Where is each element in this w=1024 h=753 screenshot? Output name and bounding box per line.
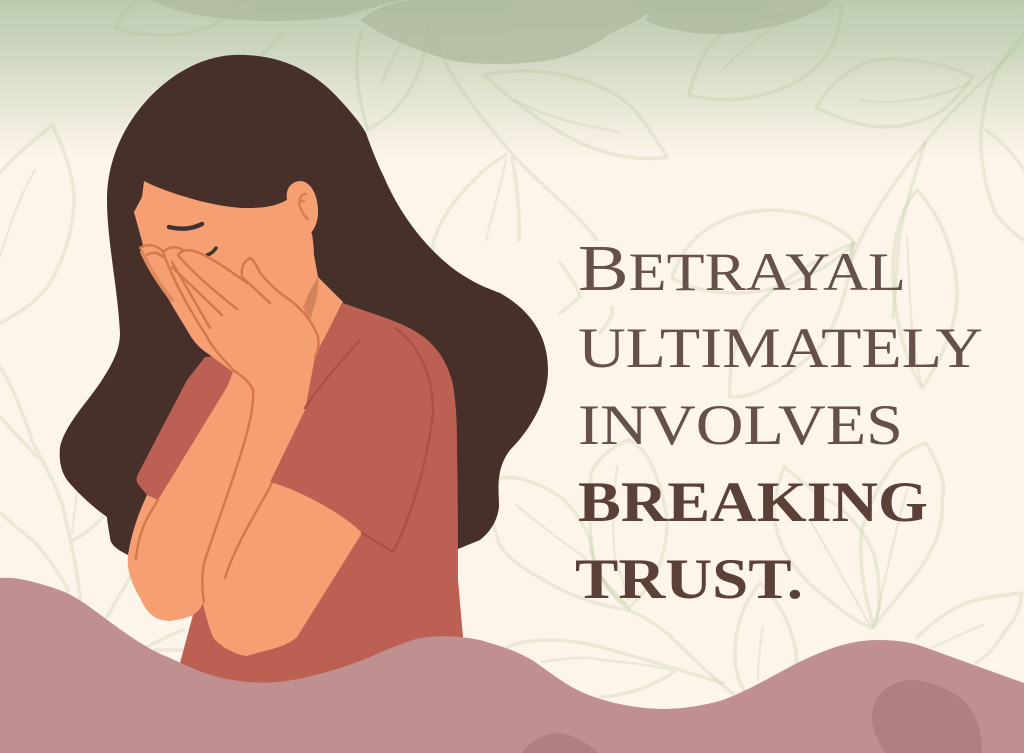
line: breaking: BREAKING bbox=[578, 471, 928, 534]
line: Betrayal: BETRAYAL bbox=[578, 232, 906, 305]
leaf outlines lower left bbox=[0, 367, 80, 600]
ear bbox=[287, 181, 318, 234]
stems bbox=[849, 40, 1024, 266]
leaf outlines lower right bbox=[492, 477, 629, 610]
top foliage bbox=[150, 0, 833, 64]
shirt bbox=[136, 303, 470, 690]
woman illustration bbox=[60, 55, 548, 690]
face bbox=[134, 181, 314, 320]
hair bbox=[60, 55, 548, 620]
leaf outlines top bbox=[484, 71, 667, 159]
line: ultimately: ULTIMATELY bbox=[578, 317, 983, 380]
sleeve seam bbox=[305, 328, 433, 552]
headline bbox=[575, 232, 983, 611]
closed eye bbox=[169, 224, 202, 229]
wave blobs bbox=[522, 680, 982, 753]
hand outlines bbox=[136, 245, 318, 602]
bottom wave bbox=[0, 578, 1024, 753]
neck bbox=[270, 230, 343, 352]
leaf outlines middle bbox=[432, 155, 506, 290]
line: involves: INVOLVES bbox=[578, 394, 903, 457]
line: trust: TRUST. bbox=[575, 548, 803, 611]
second eye lash bbox=[207, 248, 216, 255]
ear detail bbox=[299, 194, 308, 219]
hands and forearms bbox=[128, 245, 362, 656]
neck shadow bbox=[302, 277, 318, 322]
